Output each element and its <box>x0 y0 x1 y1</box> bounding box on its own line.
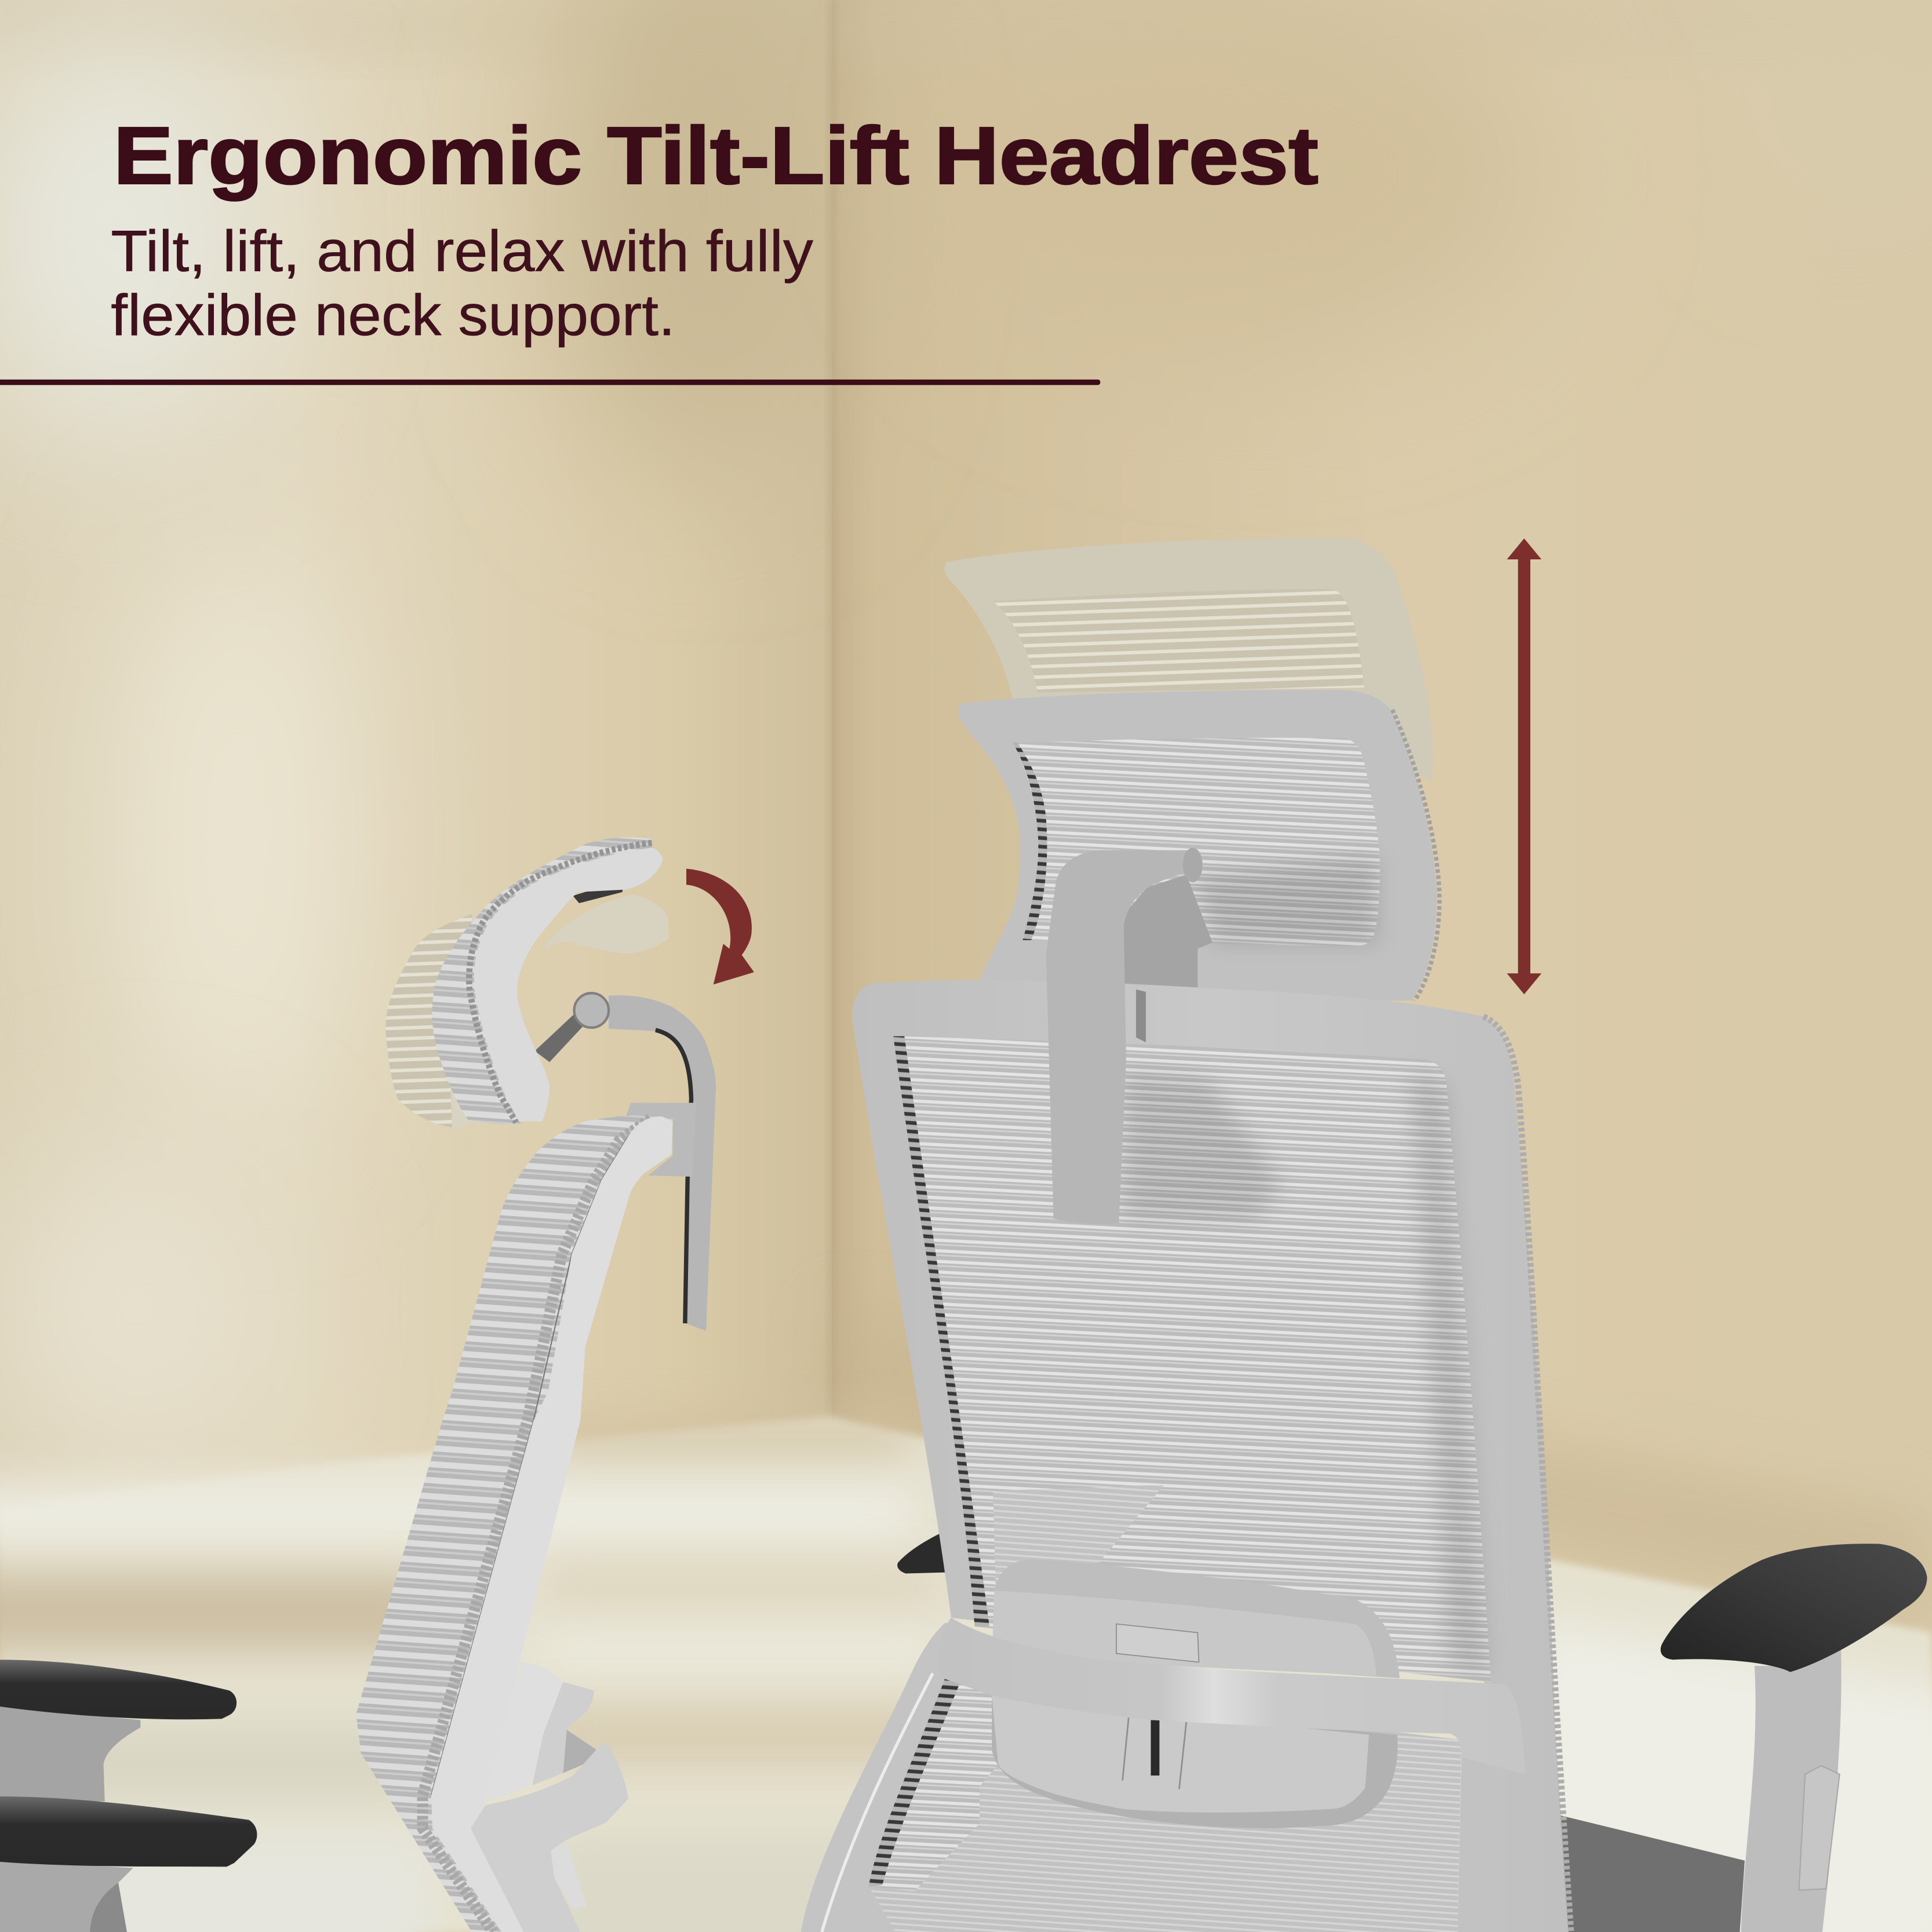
chair: side view armrests <box>0 1660 257 1932</box>
arrow: height adjustment <box>1507 539 1541 994</box>
side cross piece tail <box>551 1842 587 1909</box>
bracket pivot knob <box>1183 847 1203 882</box>
lumbar mesh wrap lower <box>992 1695 1398 1828</box>
headrest mesh shadow <box>1193 856 1377 943</box>
lumbar panel upper <box>992 1591 1376 1676</box>
headrest frame <box>958 690 1437 1004</box>
side headrest mesh <box>432 838 652 1124</box>
lumbar clip <box>1116 1624 1199 1662</box>
back mesh dark folds <box>1124 1072 1282 1220</box>
armrest lever <box>1799 1766 1840 1890</box>
back mesh outer stitching <box>1483 1017 1571 1932</box>
headrest mesh dark edge <box>1013 743 1047 940</box>
armrest: far left behind back <box>897 1533 951 1573</box>
back mesh right shade <box>1411 1072 1489 1676</box>
ghost headrest tip <box>542 894 669 954</box>
title: Ergonomic Tilt-Lift Headrest <box>114 110 1318 201</box>
upper armrest pad <box>0 1660 237 1719</box>
back frame upper <box>852 980 1569 1932</box>
side headrest stitching <box>469 843 652 1122</box>
side back mesh <box>356 1114 661 1932</box>
lower frame highlight <box>822 1673 933 1932</box>
upper arm post <box>0 1707 140 1802</box>
lumbar panel lower <box>992 1695 1369 1813</box>
seat cushion <box>1559 1815 1745 1932</box>
lower frame left <box>801 1622 963 1932</box>
clamp block <box>626 1103 696 1177</box>
side headrest frame <box>474 847 663 1121</box>
side lumbar dark opening <box>563 1730 596 1773</box>
side headrest slot <box>573 880 625 903</box>
headrest stitching <box>1392 710 1439 1000</box>
lumbar guide lines <box>1122 1718 1187 1789</box>
tilt arm rod <box>609 995 716 1331</box>
bracket mechanism <box>1115 875 1213 989</box>
side lumbar clip <box>532 1682 594 1785</box>
cross bar <box>937 1618 1526 1774</box>
chair: rear view <box>801 537 1927 1932</box>
headrest: raised ghost position <box>945 537 1432 781</box>
subtitle: Tilt, lift, and relax with fully <box>111 220 813 284</box>
lower arm post <box>0 1861 133 1932</box>
back mesh <box>893 1036 1491 1682</box>
lower arm post inner <box>90 1883 127 1932</box>
side lumbar pad <box>487 1662 563 1803</box>
side back frame <box>431 1116 673 1932</box>
armrest post <box>1741 1645 1842 1932</box>
bar shadow gap next to bracket <box>1136 989 1146 1042</box>
lower mesh dark edge <box>869 1678 960 1886</box>
headrest mesh <box>1013 738 1380 946</box>
lumbar mesh wrap upper <box>994 1559 1400 1678</box>
arrow: tilt rotation <box>686 869 754 984</box>
side back stitching <box>423 1119 650 1932</box>
armrest pad <box>1661 1544 1927 1672</box>
header rule <box>0 380 1100 385</box>
lower armrest pad <box>0 1796 257 1866</box>
ghost headrest frame <box>945 537 1432 781</box>
back mesh dark left edge <box>893 1036 989 1627</box>
ghost headrest side <box>385 914 474 1127</box>
ghost headrest mesh <box>993 589 1364 693</box>
subtitle second line: flexible neck support. <box>111 283 675 348</box>
lower mesh white stripes <box>869 1678 998 1891</box>
headrest: front position <box>958 690 1439 1004</box>
lumbar slot <box>1151 1720 1159 1775</box>
side back dark seam <box>431 1136 628 1795</box>
rod dark inner edge <box>656 1030 691 1323</box>
back mesh plain patch <box>993 1485 1165 1589</box>
lower back mesh <box>869 1678 1461 1932</box>
headrest support bracket <box>1046 850 1198 1224</box>
side cross piece <box>471 1742 628 1932</box>
ghost headrest lower tab <box>450 1072 493 1127</box>
chair: side view <box>356 838 716 1932</box>
tilt pivot knob <box>574 993 609 1028</box>
tilt arm tube <box>535 1014 584 1062</box>
